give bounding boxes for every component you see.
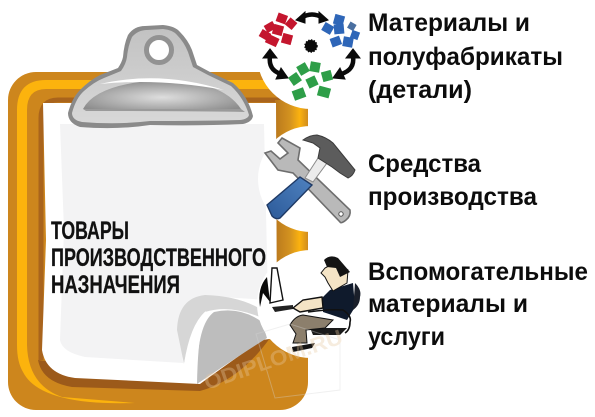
shoe [292,343,315,352]
heading: товары производственного назначения: НАЗНАЧЕНИЯ [51,271,180,299]
text: auxiliary materials and services: материалы и [368,290,528,318]
board frame [8,72,308,410]
arm [293,297,323,312]
clipboard [8,25,308,410]
heading: товары производственного назначения: ПРОИЗВОДСТВЕННОГО [51,244,266,272]
text: materials and semi-finished goods: Материалы и [368,9,530,37]
center gear [305,40,317,52]
heading: товары производственного назначения [51,217,266,299]
icon: materials cycle [259,12,360,101]
hammer handle [267,177,312,219]
text: materials and semi-finished goods [368,9,563,104]
chair back [353,283,360,310]
metal clip [68,25,253,128]
text: auxiliary materials and services: Вспомогательные [368,258,588,286]
red pieces [259,13,297,47]
hammer head [303,135,355,178]
text: means of production: производства [368,183,538,211]
text: means of production: Средства [368,150,482,178]
green pieces [288,61,333,101]
clip ring [146,38,172,62]
armrest [308,310,350,333]
legs [290,315,333,343]
text: means of production [368,150,538,211]
monitor [270,268,283,303]
white circles behind icons [257,0,369,417]
icon: wrench and hammer [265,135,355,223]
watermark: ODIPLOM.RU [201,326,346,395]
icon: man at computer [259,256,360,352]
head [321,262,348,291]
text: auxiliary materials and services [368,258,588,351]
heading: товары производственного назначения: ТОВАРЫ [51,217,129,245]
blue pieces [321,14,360,48]
text: auxiliary materials and services: услуги [368,323,445,351]
text: materials and semi-finished goods: полуфабрикаты [368,43,563,71]
paper sheet [42,103,277,384]
cycle arrows [263,12,360,79]
keyboard [272,305,293,312]
paper curl [177,295,267,384]
text: materials and semi-finished goods: (детали) [368,76,472,104]
grey inner sheet [60,124,268,363]
torso [322,283,355,320]
wrench [265,138,350,223]
seat [310,328,347,335]
